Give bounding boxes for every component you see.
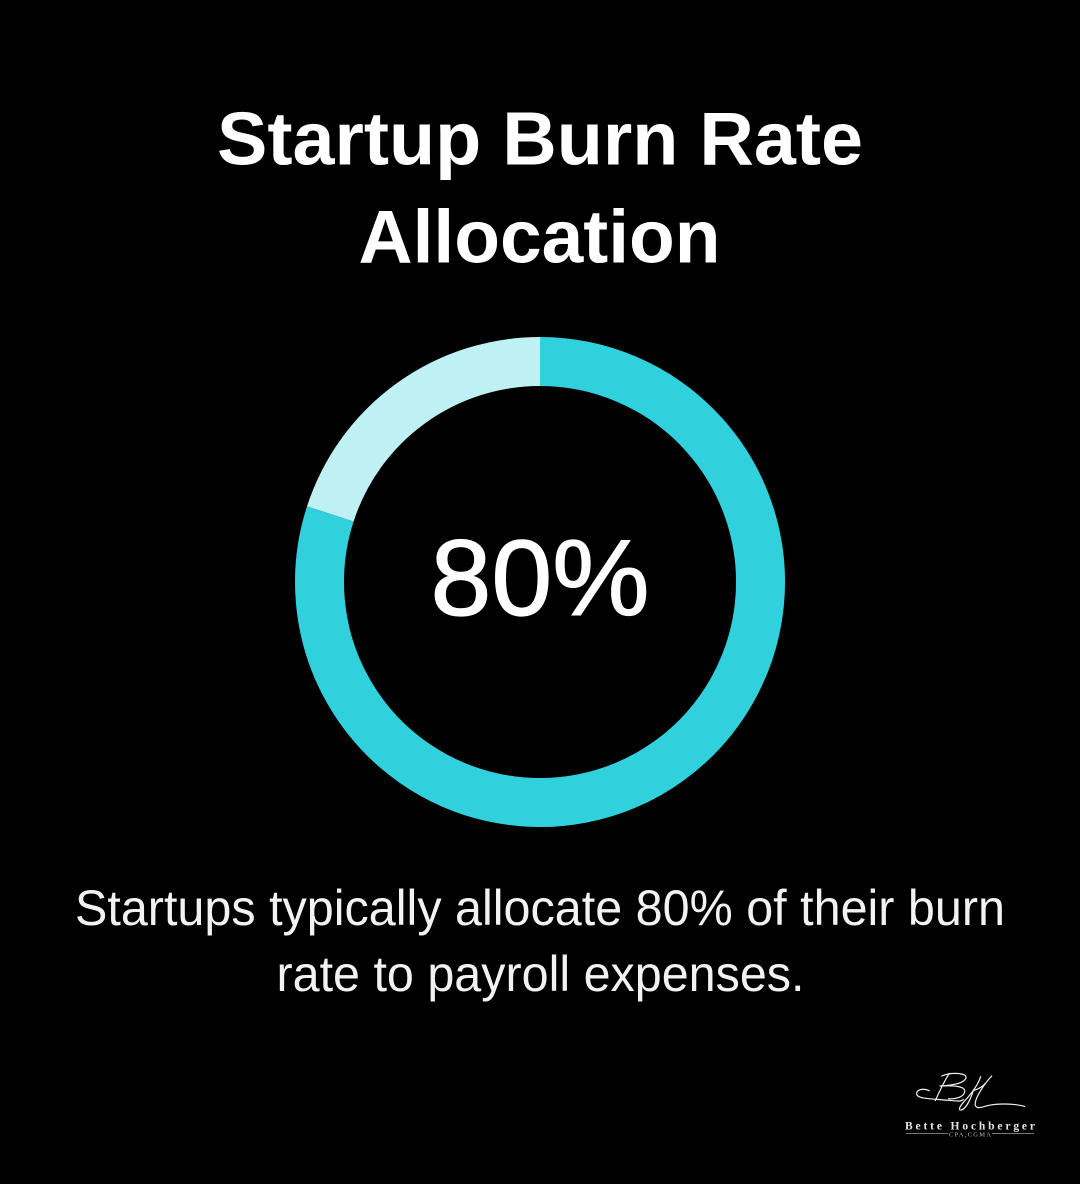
- title: Allocation: [358, 194, 720, 278]
- donut segment: 80 percent payroll: [320, 362, 761, 802]
- description text: [75, 880, 1005, 1002]
- description text: Startups typically allocate 80% of their burn: [75, 880, 1005, 936]
- description text: rate to payroll expenses.: [276, 946, 804, 1002]
- logo credentials: CPA,CGMA: [949, 1132, 991, 1138]
- logo: Bette Hochberger: [905, 1073, 1035, 1138]
- donut chart: 80 percent: [320, 362, 761, 802]
- logo name: Bette Hochberger: [905, 1120, 1035, 1132]
- icon: signature monogram: [917, 1073, 1025, 1110]
- title: Startup Burn Rate: [217, 96, 863, 180]
- donut centre value: 80%: [430, 517, 650, 638]
- title: [217, 96, 863, 278]
- donut segment: remaining 20 percent: [330, 362, 540, 514]
